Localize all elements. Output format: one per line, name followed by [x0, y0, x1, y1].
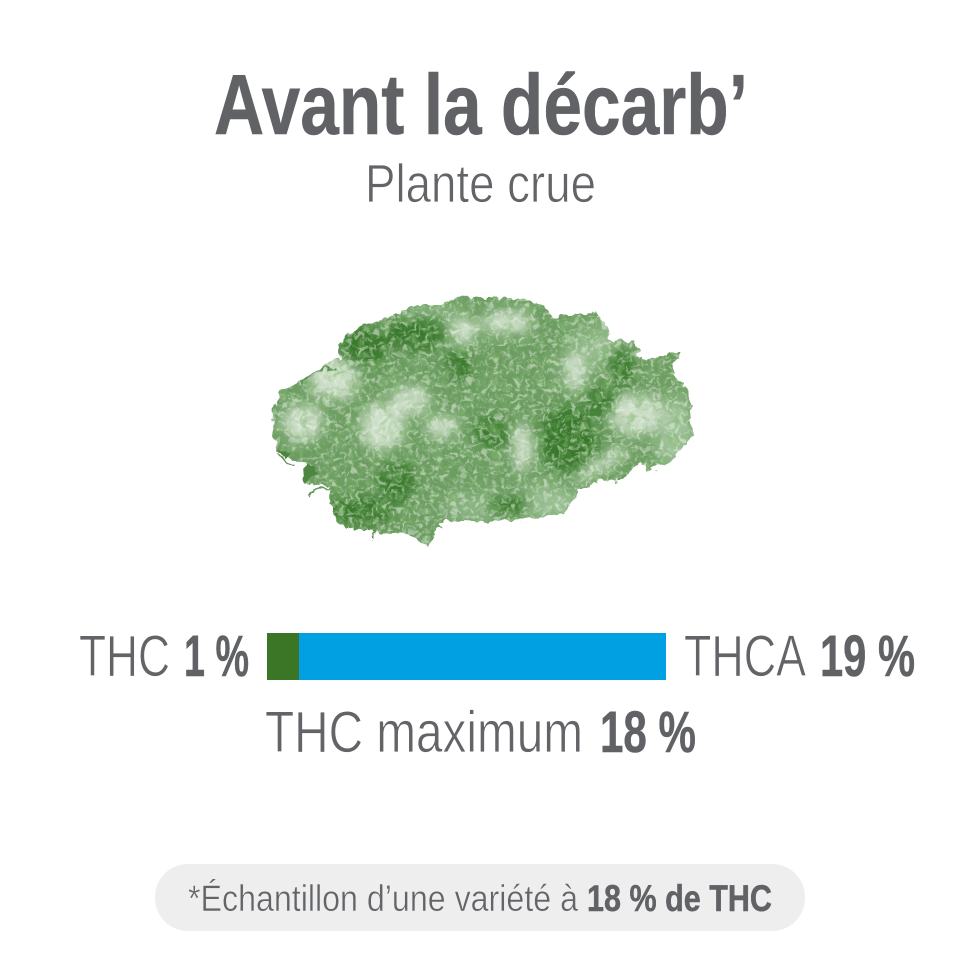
label: THCA 19 % — [684, 624, 915, 689]
footnote pill: *Échantillon d’une variété à — [188, 878, 578, 919]
bar segment: THC — [267, 633, 299, 680]
illustration: green cannabis bud — [260, 285, 700, 550]
bar segment: THCA — [299, 633, 666, 680]
footnote pill: 18 % de THC — [587, 878, 772, 919]
label: THC maximum 18 %: THC maximum — [265, 700, 583, 765]
stacked bar: THC vs THCA — [267, 633, 666, 680]
title: Avant la décarb’ — [214, 58, 748, 153]
label: THC maximum 18 %: 18 % — [600, 700, 696, 765]
label: THCA 19 %: 19 % — [820, 624, 915, 689]
label: THC 1 %: 1 % — [184, 624, 249, 689]
footnote pill — [155, 864, 805, 931]
subtitle: Plante crue — [365, 154, 596, 214]
small leaf tips and hairs — [277, 366, 373, 536]
label: THC 1 %: THC — [79, 624, 170, 689]
label: THCA 19 %: THCA — [684, 624, 806, 689]
